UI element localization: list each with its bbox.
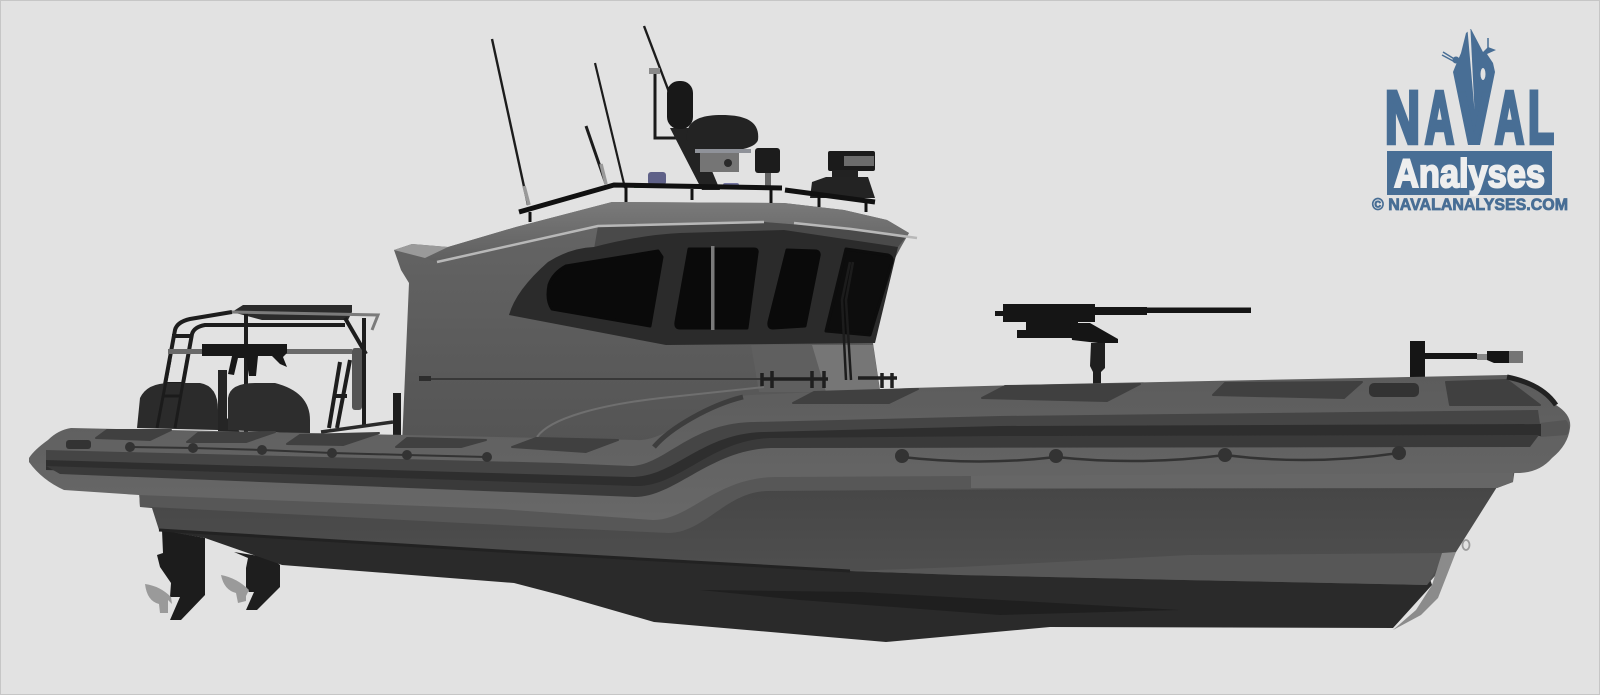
outboard lower unit left <box>145 530 205 620</box>
spotlight <box>828 151 875 171</box>
lighter chine band <box>850 553 1446 585</box>
grab rail forward <box>794 223 917 238</box>
radar dome <box>687 115 758 151</box>
brow below rail <box>594 222 905 249</box>
rifle <box>202 344 287 376</box>
deck recess <box>654 397 743 447</box>
bow shackle <box>1462 540 1470 550</box>
canopy <box>232 305 352 320</box>
seat post <box>218 370 240 432</box>
barrel <box>1095 307 1147 315</box>
grab rail aft <box>437 222 764 262</box>
window 1 <box>548 251 662 326</box>
logo word NAVAL: N <box>1385 76 1420 159</box>
camera turret <box>667 81 693 129</box>
gun receiver <box>1003 304 1095 338</box>
logo url: © NAVALANALYSES.COM <box>1372 196 1568 214</box>
pedestal <box>1090 343 1105 384</box>
frame tubes <box>157 312 366 432</box>
green light <box>634 185 645 188</box>
cabin body <box>394 202 909 445</box>
roof sensors mast <box>634 68 875 198</box>
lower rub strip <box>139 468 1515 533</box>
bow fender tip <box>1540 420 1569 437</box>
outboard lower unit right <box>221 552 280 610</box>
antennas <box>492 26 669 205</box>
dark lower hull <box>159 530 1432 642</box>
gps bracket <box>655 72 682 138</box>
logo ship slit and porthole <box>1468 30 1486 110</box>
dark stripe 2 <box>46 424 1541 487</box>
sensor arm <box>670 128 720 190</box>
logo: Naval Analyses <box>1372 29 1568 214</box>
sensor box <box>700 153 739 172</box>
cabin roof <box>425 202 909 262</box>
non-skid pads <box>96 380 1540 452</box>
blue beacons <box>648 172 666 185</box>
logo word NAVAL: A <box>1425 76 1454 159</box>
cabin seam <box>419 378 762 380</box>
ladder front of engines <box>157 360 187 428</box>
logo word NAVAL: L <box>1528 76 1554 159</box>
logo word NAVAL: V <box>1458 76 1490 159</box>
t-top frame and rifle <box>157 305 378 432</box>
logo word NAVAL <box>1385 76 1554 159</box>
right stanchion and arm <box>321 393 401 435</box>
engine cowling right <box>228 383 310 434</box>
roof rack <box>519 185 875 222</box>
work light <box>755 148 780 173</box>
lifeline pegs bow <box>895 446 1406 463</box>
window 2 <box>676 249 757 328</box>
outboard engines <box>137 383 310 434</box>
hull <box>139 465 1500 642</box>
cradle <box>1070 323 1118 343</box>
engine cowling left <box>137 383 218 430</box>
logo banner <box>1387 151 1552 195</box>
propeller left <box>145 584 172 613</box>
logo ship <box>1442 29 1496 145</box>
deck hardware <box>762 371 897 388</box>
deck handles <box>1369 383 1419 397</box>
logo word Analyses: Analyses <box>1394 152 1545 196</box>
logo word NAVAL: A <box>1495 76 1524 159</box>
dark stripe 1 <box>46 410 1540 478</box>
bow fender <box>1507 377 1556 405</box>
tube silhouette <box>29 375 1570 520</box>
silver bow edge <box>1393 552 1456 630</box>
upper hull <box>139 465 1500 585</box>
hull keel stripe <box>159 530 850 571</box>
inflatable tube <box>29 375 1570 533</box>
window 4 <box>826 249 892 335</box>
window 3 <box>769 250 819 328</box>
bow staff and light <box>1410 341 1523 381</box>
lifeline pegs stern <box>125 442 492 462</box>
machine gun <box>995 304 1251 384</box>
lifeline bow <box>902 453 1399 462</box>
front cabin lower facets <box>751 345 826 392</box>
deck pale crease <box>537 387 764 437</box>
dark stripe 3 <box>46 435 1539 497</box>
lifeline stern <box>130 447 487 457</box>
window band <box>509 230 898 345</box>
cabin <box>394 185 917 445</box>
windshield post and mast <box>842 262 853 380</box>
propeller right <box>221 575 249 603</box>
